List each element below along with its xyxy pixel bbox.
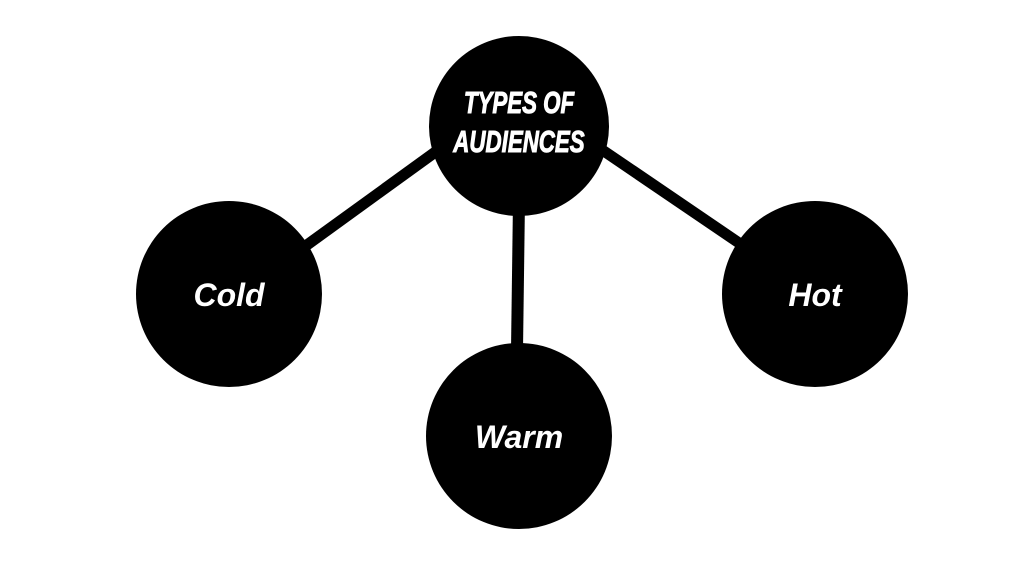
connector: center to cold	[300, 145, 445, 250]
connector: center to hot	[595, 145, 742, 245]
node: warm: Warm	[475, 419, 563, 455]
connector: center to warm	[517, 200, 519, 350]
center node: types of audiences	[429, 36, 609, 216]
node: warm	[426, 343, 612, 529]
node: cold	[136, 201, 322, 387]
node: cold: Cold	[193, 277, 266, 313]
center node: types of audiences: AUDIENCES	[452, 124, 585, 159]
node: hot: Hot	[788, 277, 843, 313]
node: hot	[722, 201, 908, 387]
center node: types of audiences: TYPES OF	[464, 85, 575, 120]
